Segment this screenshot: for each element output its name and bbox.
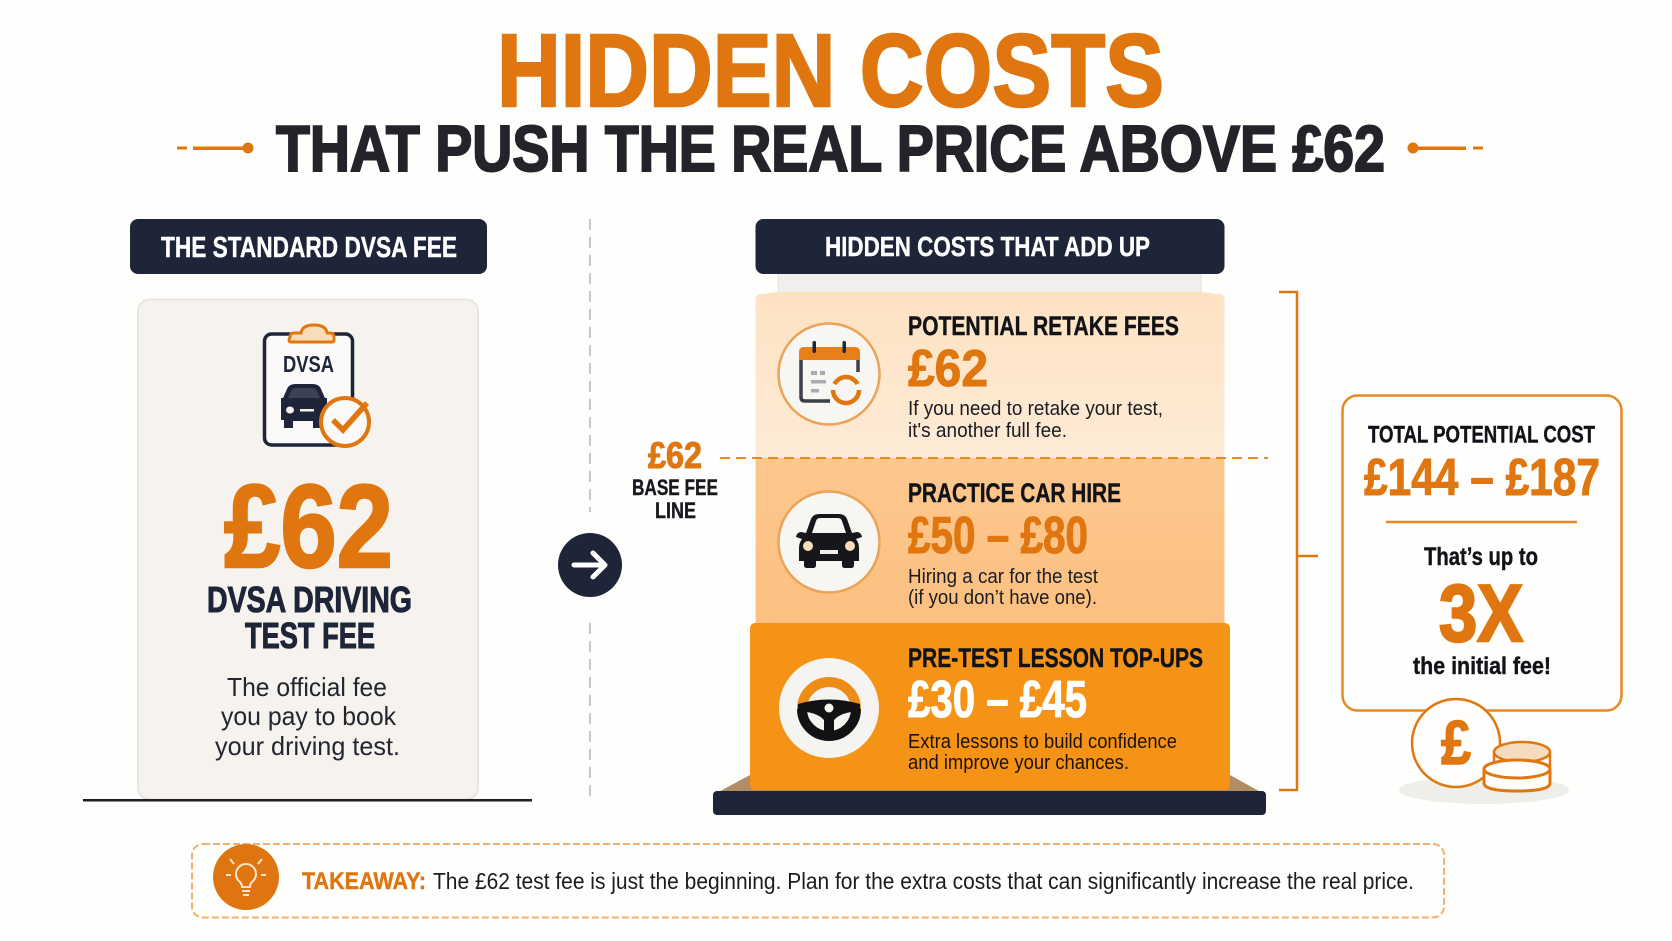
car hire text: PRACTICE CAR HIRE [908, 478, 1121, 508]
fee description: your driving test. [215, 731, 400, 761]
arrow [558, 533, 622, 597]
right header: HIDDEN COSTS THAT ADD UP [825, 231, 1150, 262]
fee description [215, 672, 400, 761]
panel: total potential cost [1342, 396, 1622, 710]
retake text [908, 311, 1179, 442]
fee label [207, 579, 412, 656]
fee description: The official fee [227, 672, 387, 702]
retake text: it's another full fee. [908, 420, 1067, 442]
icon: DVSA clipboard [264, 325, 369, 446]
base fee label: £62 [648, 435, 702, 476]
icon: car [778, 492, 880, 592]
tier: retake fees [756, 292, 1224, 460]
tier: lesson top-ups [750, 623, 1230, 790]
base fee line [720, 457, 1268, 459]
comparison text: That’s up to [1424, 543, 1538, 571]
base platform [713, 775, 1266, 815]
base fee label: LINE [655, 498, 696, 523]
tier: car hire [756, 458, 1224, 628]
left header [130, 219, 487, 274]
takeaway text: The £62 test fee is just the beginning. Plan for the extra costs that can significantly increase the real price. [433, 868, 1414, 894]
takeaway text: TAKEAWAY: [302, 868, 426, 895]
base fee label [632, 435, 718, 523]
lesson text: £30 – £45 [908, 671, 1087, 729]
base fee label: BASE FEE [632, 475, 718, 500]
lesson text: PRE-TEST LESSON TOP-UPS [908, 643, 1203, 673]
icon: calendar [778, 324, 880, 424]
lesson text: and improve your chances. [908, 752, 1129, 774]
fee label: TEST FEE [245, 615, 375, 656]
fee description: you pay to book [221, 701, 397, 731]
bracket [1279, 292, 1318, 790]
subtitle ornament right [1408, 142, 1483, 154]
total label: TOTAL POTENTIAL COST [1368, 422, 1595, 448]
ground line [83, 799, 532, 802]
icon: coins: £ [1441, 709, 1471, 778]
comparison end text: the initial fee! [1413, 653, 1551, 680]
icon: DVSA clipboard: DVSA [283, 351, 334, 377]
retake text: If you need to retake your test, [908, 398, 1163, 420]
retake text: POTENTIAL RETAKE FEES [908, 311, 1179, 341]
title: HIDDEN COSTS [497, 13, 1164, 128]
car hire text: £50 – £80 [908, 507, 1088, 565]
car hire text: Hiring a car for the test [908, 566, 1098, 588]
right header [756, 219, 1224, 274]
fee label: DVSA DRIVING [207, 579, 412, 620]
divider [589, 219, 591, 803]
icon: light bulb [213, 844, 279, 910]
left header: THE STANDARD DVSA FEE [161, 232, 457, 264]
lesson text: Extra lessons to build confidence [908, 731, 1177, 753]
car hire text [908, 478, 1121, 609]
icon: steering wheel [779, 658, 879, 758]
stack top strip [778, 272, 1201, 294]
takeaway bar [192, 844, 1444, 918]
total value: £144 – £187 [1364, 449, 1600, 507]
subtitle ornament left [177, 142, 254, 154]
multiplier: 3X [1439, 569, 1523, 659]
big price: £62 [224, 461, 393, 593]
retake text: £62 [908, 340, 988, 398]
subtitle: THAT PUSH THE REAL PRICE ABOVE £62 [276, 112, 1385, 185]
lesson text [908, 643, 1203, 774]
icon: coins [1399, 699, 1569, 804]
panel: standard fee [138, 300, 478, 800]
car hire text: (if you don’t have one). [908, 587, 1097, 609]
